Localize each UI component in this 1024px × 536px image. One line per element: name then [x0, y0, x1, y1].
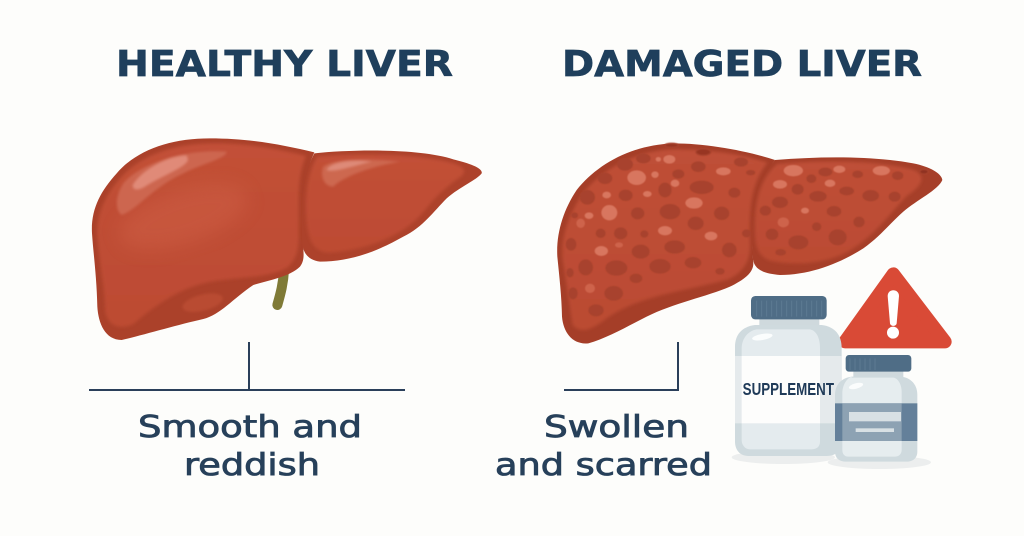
right lobe surface [755, 161, 921, 263]
title: healthy liver: HEALTHY LIVER [116, 44, 453, 85]
caption: healthy liver: reddish [184, 448, 320, 483]
left highlight [117, 151, 227, 215]
caption: damaged liver [495, 410, 712, 483]
caption: damaged liver: and scarred [495, 448, 712, 483]
caption: damaged liver: Swollen [544, 410, 689, 445]
bracket: damaged liver pointer [564, 342, 678, 390]
title: damaged liver: DAMAGED LIVER [562, 44, 922, 85]
right lobe outer [752, 157, 942, 275]
right bright highlight [327, 161, 372, 171]
soft glow [112, 171, 255, 263]
small bottle [835, 355, 917, 462]
icon: warning triangle [845, 274, 945, 342]
caption: healthy liver: Smooth and [138, 410, 362, 445]
left lobe outer [92, 138, 314, 340]
left bright highlight [133, 155, 188, 189]
illustration: healthy liver [92, 138, 482, 340]
large supplement bottle [735, 296, 842, 456]
right lobe outer [301, 151, 482, 262]
dark scar nodules [566, 143, 928, 316]
right lobe surface [306, 155, 464, 253]
illustration: damaged liver [557, 143, 942, 343]
left lobe surface [97, 143, 306, 327]
light nodules [576, 155, 890, 293]
gallbladder [181, 290, 225, 315]
right highlight [322, 160, 400, 187]
caption: healthy liver [138, 410, 362, 483]
left lobe surface [562, 149, 767, 330]
bottle label text: SUPPLEMENT [743, 379, 834, 399]
bile duct [277, 270, 284, 305]
supplement bottles and warning [732, 274, 945, 469]
bottle shadows [732, 451, 931, 469]
bracket: healthy liver pointer [89, 342, 405, 390]
left lobe outer [557, 143, 775, 343]
